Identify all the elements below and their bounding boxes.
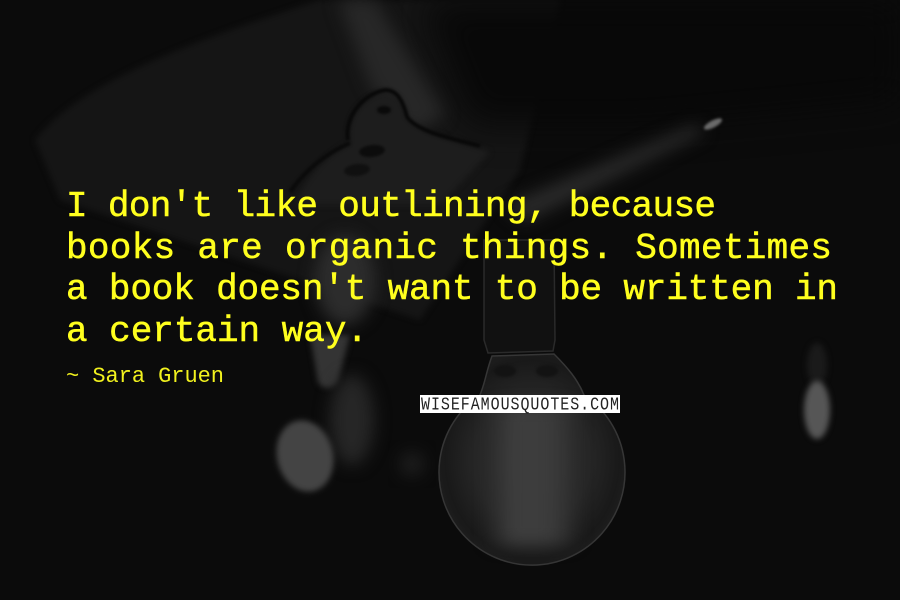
quote text: books are organic things. Sometimes [66, 228, 832, 269]
quote text: a certain way. [66, 311, 368, 352]
background bokeh blobs [315, 235, 375, 325]
bulb central glow [485, 405, 580, 545]
hat-shaped dark mass [35, 0, 560, 320]
shoulder plate with keyhole shape [295, 92, 490, 205]
bulb socket [484, 240, 555, 353]
rivet holes [377, 106, 391, 114]
quote text [66, 186, 838, 352]
author attribution: ~ Sara Gruen [66, 364, 224, 389]
top right shadow [420, 0, 900, 125]
quote text: a book doesn't want to be written in [66, 269, 838, 310]
light bulb [439, 240, 625, 565]
diagonal streak [505, 125, 705, 222]
watermark: WISEFAMOUSQUOTES.COM [421, 395, 619, 416]
dark outline of plate [347, 90, 480, 146]
quote text: I don't like outlining, because [66, 186, 716, 227]
bulb glass [439, 354, 625, 565]
diagonal light band [338, 0, 445, 135]
bulb neck highlights [494, 365, 516, 377]
